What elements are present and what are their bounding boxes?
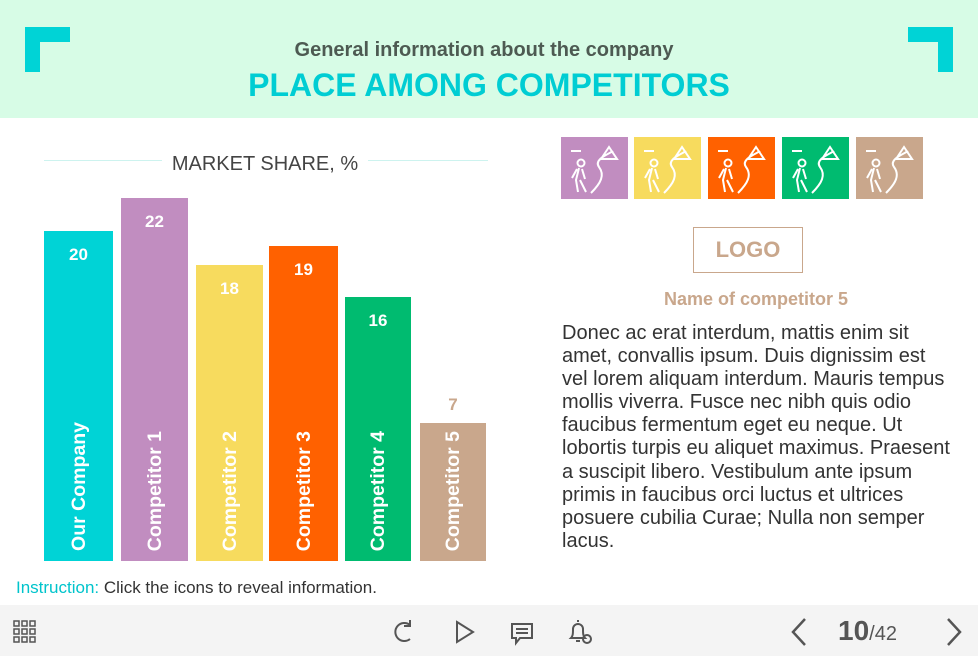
bar chart <box>44 198 486 561</box>
bar: Competitor 2: 18 <box>220 279 239 298</box>
icon: menu grid <box>13 620 36 643</box>
competitor name: Name of competitor 5 <box>664 289 848 309</box>
icon: previous <box>791 618 806 646</box>
bar: Competitor 2 <box>196 265 263 561</box>
icon: next <box>947 618 962 646</box>
instruction: Instruction: Click the icons to reveal information. <box>16 578 377 597</box>
bar: Competitor 4: 16 <box>369 311 387 330</box>
chart title: MARKET SHARE, % <box>172 153 358 175</box>
header band <box>0 0 978 118</box>
icon: competitor 5 <box>856 137 923 199</box>
bottom toolbar <box>0 605 978 656</box>
title: PLACE AMONG COMPETITORS <box>248 67 730 103</box>
bar: Competitor 5: Competitor 5 <box>442 431 464 551</box>
icon: bell <box>568 620 592 644</box>
corner bracket left <box>25 27 70 72</box>
bar: Competitor 4 <box>345 297 411 561</box>
bar: Competitor 3: 19 <box>294 260 313 279</box>
icon: comments <box>511 623 533 646</box>
bar: Competitor 2: Competitor 2 <box>218 431 240 551</box>
icon: competitor 3 <box>708 137 775 199</box>
bar: Competitor 1 <box>121 198 188 561</box>
subtitle: General information about the company <box>295 39 673 61</box>
logo box <box>693 227 803 273</box>
bar: Our Company <box>44 231 113 561</box>
description text: Donec ac erat interdum, mattis enim sit amet, convallis ipsum. Duis dignissim est vel lorem aliquam interdum. Mauris tempus mollis viverra. Fusce nec nibh quis odio faucibus fermentum eget eu neque. Ut lobortis turpis eu aliquet maximus. Praesent a suscipit libero. Vestibulum ante ipsum primis in faucibus orci luctus et ultrices posuere cubilia Curae; Nulla non semper lacus. <box>562 322 950 552</box>
bar chart: 7 <box>448 395 458 414</box>
bar: Competitor 5 <box>420 423 486 561</box>
competitor icons row <box>561 137 923 199</box>
bar: Our Company: Our Company <box>68 422 90 551</box>
bar: Competitor 1: Competitor 1 <box>144 431 166 551</box>
icon: competitor 2 <box>634 137 701 199</box>
logo box: LOGO <box>716 237 780 262</box>
icon: replay <box>394 620 411 642</box>
bar: Competitor 3: Competitor 3 <box>292 431 314 551</box>
corner bracket right <box>908 27 953 72</box>
bar: Competitor 1: 22 <box>145 212 164 231</box>
bar: Competitor 3 <box>269 246 338 561</box>
page counter: 10/42 <box>838 615 897 646</box>
bar: Our Company: 20 <box>69 245 88 264</box>
icon: competitor 1 <box>561 137 628 199</box>
icon: competitor 4 <box>782 137 849 199</box>
icon: play <box>456 620 475 644</box>
bar: Competitor 4: Competitor 4 <box>367 431 389 551</box>
